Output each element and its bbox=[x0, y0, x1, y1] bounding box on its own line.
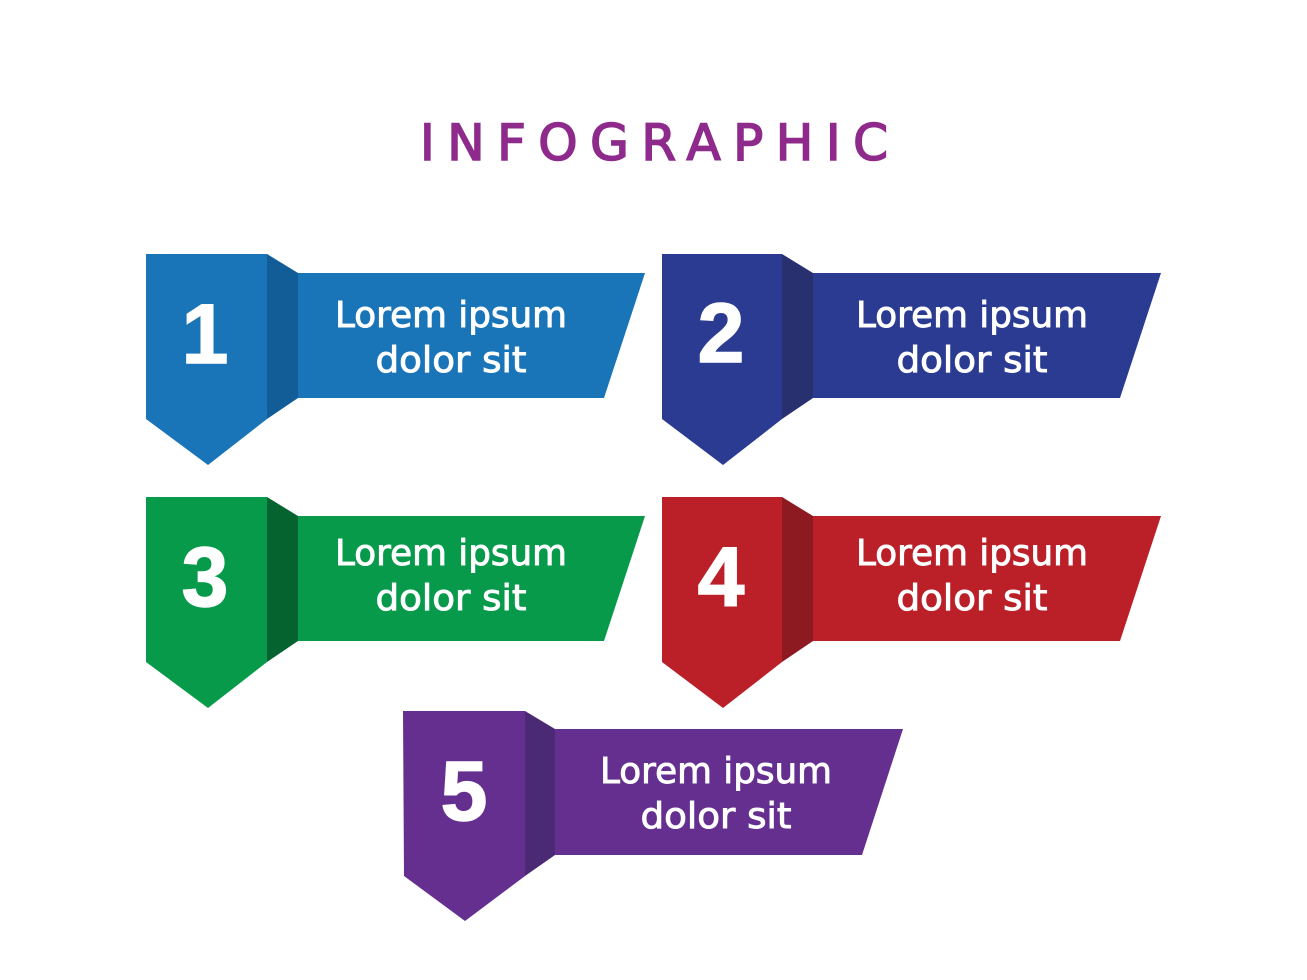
number 1: 1 bbox=[182, 287, 228, 381]
fold 1 bbox=[267, 254, 298, 419]
label 2 line 2: dolor sit bbox=[896, 340, 1048, 381]
label 4 line 2: dolor sit bbox=[896, 578, 1048, 619]
ribbon 3 bbox=[290, 516, 645, 641]
tab 2 bbox=[662, 254, 782, 465]
tab 4 bbox=[662, 497, 782, 708]
number 5: 5 bbox=[441, 744, 487, 838]
tab 3 bbox=[146, 497, 267, 708]
fold 2 bbox=[782, 254, 813, 419]
panel: item 1 bbox=[146, 254, 645, 465]
label 1: Lorem ipsum bbox=[335, 295, 567, 336]
label 3 line 2: dolor sit bbox=[376, 578, 526, 619]
label 1 line 2: dolor sit bbox=[376, 340, 526, 381]
fold 5 bbox=[525, 711, 555, 876]
ribbon 4 bbox=[805, 516, 1161, 641]
label 5: Lorem ipsum bbox=[600, 751, 832, 792]
label 3: Lorem ipsum bbox=[335, 533, 567, 574]
ribbon 5 bbox=[547, 729, 903, 855]
panel: item 2 bbox=[662, 254, 1161, 465]
tab 5 bbox=[403, 711, 525, 921]
label 5 line 2: dolor sit bbox=[640, 796, 792, 837]
panel: item 5 bbox=[403, 711, 903, 921]
title: INFOGRAPHIC bbox=[420, 114, 888, 172]
panel: item 4 bbox=[662, 497, 1161, 708]
panel: item 3 bbox=[146, 497, 645, 708]
label 4: Lorem ipsum bbox=[856, 533, 1088, 574]
ribbon 2 bbox=[805, 273, 1161, 398]
tab 1 bbox=[146, 254, 267, 465]
ribbon 1 bbox=[290, 273, 645, 398]
number 4: 4 bbox=[698, 530, 745, 624]
fold 4 bbox=[782, 497, 813, 662]
number 2: 2 bbox=[698, 286, 744, 380]
label 2: Lorem ipsum bbox=[856, 295, 1088, 336]
fold 3 bbox=[267, 497, 298, 662]
number 3: 3 bbox=[182, 530, 228, 624]
